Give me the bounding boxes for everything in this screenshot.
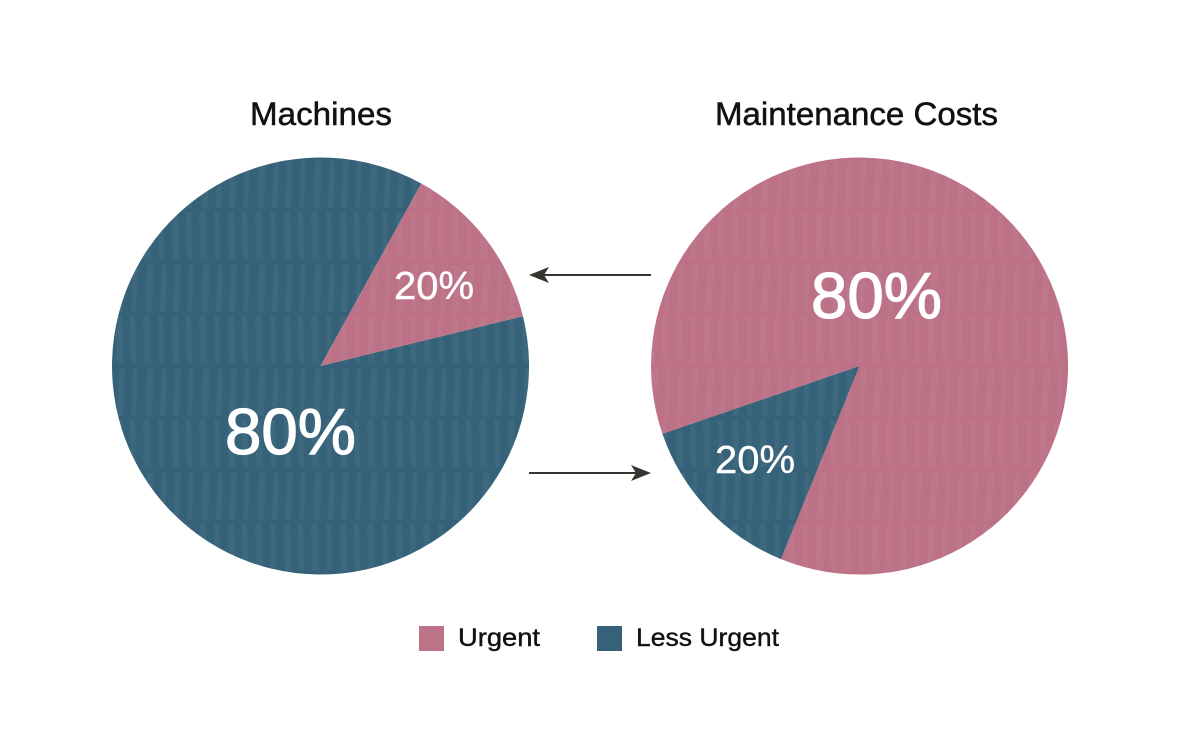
slice: urgent 20% [320,184,523,366]
pie chart: maintenance costs [651,158,1068,575]
slice: less urgent 80% [112,158,529,575]
label: costs urgent 80%: 80% [811,259,942,332]
legend swatch: less urgent [597,626,622,651]
arrow: left, from costs to machines [529,267,651,283]
heading: machines: Machines [250,96,392,132]
legend label: less urgent: Less Urgent [636,624,779,652]
pie chart: machines [112,158,529,575]
label: machines urgent 20%: 20% [394,265,474,308]
slice: less urgent 20% [662,366,860,559]
arrow: right, from machines to costs [529,465,651,481]
legend label: urgent: Urgent [458,624,540,652]
legend swatch: urgent [419,626,444,651]
heading: maintenance costs: Maintenance Costs [715,96,998,132]
label: machines less urgent 80%: 80% [225,395,356,468]
slice: urgent 80% [651,158,1068,575]
legend [419,624,779,652]
label: costs less urgent 20%: 20% [715,439,795,482]
